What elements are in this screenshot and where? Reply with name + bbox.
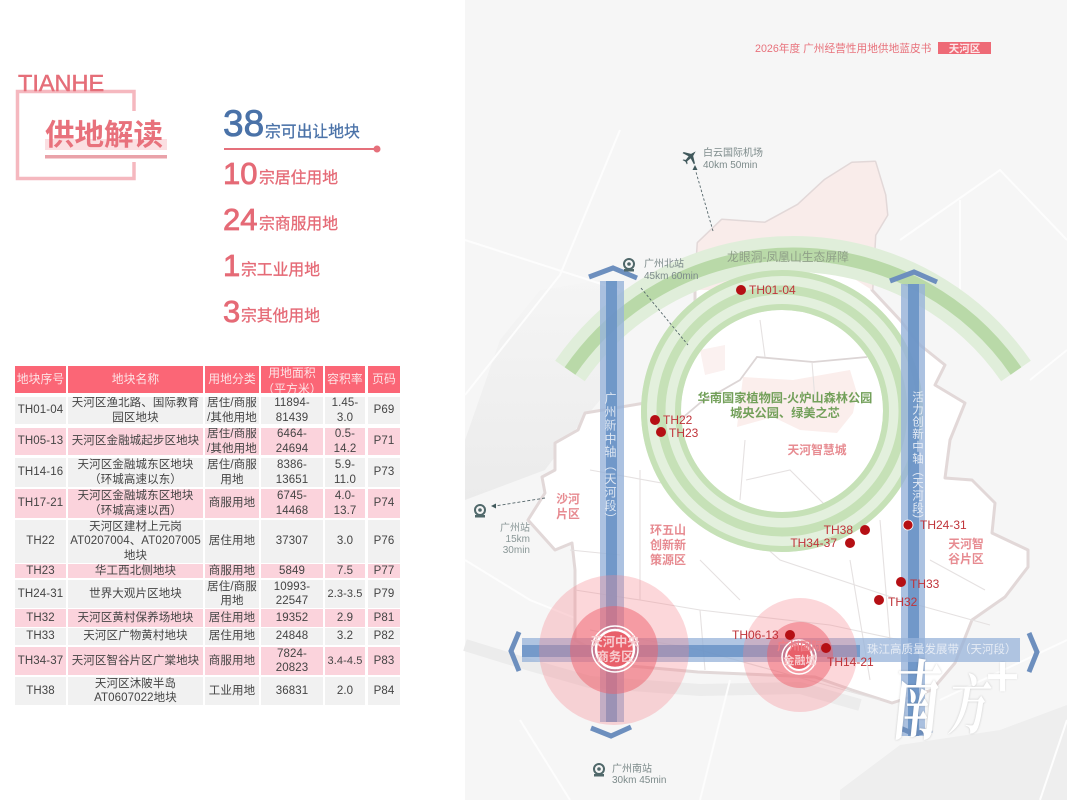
transit: Baiyun airport: 40km 50min — [703, 160, 757, 171]
row TH17-21: P74 — [374, 497, 394, 509]
right axis vertical label: 活力创新中轴（天河段） — [911, 390, 924, 526]
stat: 10 residential — [223, 156, 338, 191]
row TH34-37: P83 — [374, 655, 394, 667]
axis arrow chevrons — [511, 268, 1037, 736]
row TH14-16: 11.0 — [334, 474, 356, 486]
title block: TIANHE 供地解读 — [16, 70, 167, 180]
row TH24-31: 世界大观片区地块 — [89, 588, 182, 600]
transit: Guangzhou station: 广州站 — [500, 521, 530, 534]
row TH32: P81 — [374, 612, 394, 624]
row TH24-31: 22547 — [276, 595, 308, 607]
table header: 地块名称 — [112, 372, 159, 386]
row TH01-04: /其他用地 — [207, 412, 257, 424]
row TH05-13: TH05-13 — [18, 435, 63, 447]
row TH05-13: 6464- — [277, 428, 307, 440]
marker TH06-13: TH06-13 — [732, 628, 779, 642]
zone label: 环五山 — [650, 523, 686, 567]
watermark: 南方+: 南 — [889, 655, 945, 751]
marker TH34-37: TH34-37 — [790, 536, 837, 550]
row TH22: TH22 — [26, 535, 55, 547]
transit: Baiyun airport: 白云国际机场 — [703, 146, 763, 159]
left vertical axis bar — [600, 281, 624, 722]
stat: 3 other: 3 — [223, 294, 240, 329]
river axis label: 珠江高质量发展带（天河段） — [867, 642, 1016, 656]
row TH24-31: 10993- — [274, 581, 310, 593]
row TH23: TH23 — [26, 565, 55, 577]
table header — [15, 366, 400, 393]
row TH33: 天河区广物黄村地块 — [83, 630, 188, 642]
row TH17-21: TH17-21 — [18, 497, 63, 509]
transit: Guangzhou North station: 45km 60min — [644, 271, 698, 282]
district tag — [938, 42, 991, 54]
row TH23: P77 — [374, 565, 394, 577]
row TH32: 19352 — [276, 612, 308, 624]
marker TH22 — [650, 413, 693, 427]
marker TH38: TH38 — [824, 523, 853, 537]
row TH22: 地块 — [124, 550, 147, 562]
row TH05-13 — [15, 428, 400, 455]
row TH14-16: 天河区金融城东区地块 — [78, 459, 194, 471]
row TH33 — [15, 628, 400, 645]
row TH14-16: 5.9- — [335, 459, 355, 471]
finance city circle: 金融城 — [784, 653, 816, 667]
stat: 10 residential: 宗居住用地 — [259, 170, 338, 187]
district outline — [528, 162, 1028, 703]
row TH01-04: 天河区渔北路、国际教育 — [72, 397, 199, 409]
decorative frame — [16, 90, 167, 180]
right vertical axis bar — [901, 284, 925, 736]
transit: Guangzhou station: 30min — [503, 545, 530, 556]
stat: 38 parcels — [223, 103, 360, 144]
zone label: 天河智慧城: 天河智慧城 — [788, 443, 847, 457]
row TH01-04 — [15, 397, 400, 424]
transit: Guangzhou North station: 广州北站 — [644, 257, 684, 270]
table header: 用地面积 — [268, 366, 316, 380]
row TH24-31 — [15, 580, 400, 608]
marker TH23 — [656, 426, 699, 440]
chinese heading: 供地解读 — [45, 119, 163, 152]
zone label: 沙河片区 — [556, 492, 580, 521]
marker TH33: TH33 — [910, 577, 940, 591]
marker TH01-04: TH01-04 — [749, 283, 796, 297]
row TH23 — [15, 564, 400, 578]
row TH14-16: （环城高速以东） — [89, 474, 182, 486]
park label: 华南国家植物园-火炉山森林公园 — [698, 390, 872, 405]
row TH22: 3.0 — [337, 535, 353, 547]
row TH17-21: 天河区金融城东区地块 — [78, 490, 194, 502]
row TH38: P84 — [374, 685, 394, 697]
row TH14-16: 用地 — [220, 474, 244, 486]
row TH32: 居住用地 — [209, 612, 255, 624]
table header: 容积率 — [327, 372, 363, 386]
park label — [698, 390, 872, 420]
row TH17-21: 6745- — [277, 490, 307, 502]
stat: 1 industrial: 宗工业用地 — [241, 262, 320, 279]
row TH24-31: 2.3-3.5 — [328, 588, 362, 600]
row TH34-37 — [15, 647, 400, 675]
row TH01-04: 3.0 — [337, 412, 353, 424]
watermark: 南方+ — [889, 644, 1019, 751]
left axis vertical label: 广州新中轴（天河段） — [603, 392, 617, 526]
marker TH22: TH22 — [663, 413, 693, 427]
row TH17-21: 4.0- — [335, 490, 355, 502]
row TH17-21: 13.7 — [334, 504, 356, 516]
row TH34-37: 20823 — [276, 662, 308, 674]
row TH24-31: 居住/商服 — [207, 581, 257, 593]
row TH23: 商服用地 — [209, 565, 255, 577]
row TH14-16: 8386- — [277, 459, 307, 471]
row TH24-31: TH24-31 — [18, 588, 63, 600]
CBD circle: 商务区 — [597, 649, 633, 664]
stat: 38 parcels: 38 — [223, 103, 264, 144]
stat: 38 parcels: 宗可出让地块 — [265, 124, 360, 141]
row TH22: 37307 — [276, 535, 308, 547]
transit: Guangzhou station — [475, 498, 545, 556]
transit: Baiyun airport — [679, 146, 763, 231]
row TH14-16 — [15, 458, 400, 487]
row TH17-21: 14468 — [276, 504, 308, 516]
header line with district tag — [755, 42, 991, 55]
row TH38: TH38 — [26, 685, 55, 697]
ecological barrier label: 龙眼洞-凤凰山生态屏障 — [727, 250, 849, 264]
table header: 地块序号 — [17, 372, 64, 386]
row TH01-04: 园区地块 — [112, 412, 159, 424]
row TH34-37: 3.4-4.5 — [328, 655, 362, 667]
row TH01-04: 81439 — [276, 412, 308, 424]
stat: 24 commercial — [223, 202, 338, 237]
row TH17-21: （环城高速以西） — [89, 504, 182, 516]
row TH22: 天河区建材上元岗 — [89, 521, 182, 533]
row TH34-37: TH34-37 — [18, 655, 63, 667]
stat: 3 other: 宗其他用地 — [241, 308, 320, 325]
stat: 1 industrial — [223, 248, 320, 283]
row TH33: 居住用地 — [209, 630, 255, 642]
row TH38: 天河区沐陂半岛 — [95, 678, 176, 690]
row TH14-16: TH14-16 — [18, 466, 63, 478]
zone label: 天河智谷片区: 谷片区 — [948, 552, 984, 566]
horizontal Pearl River axis bar — [522, 638, 1020, 662]
stat: 24 commercial: 24 — [223, 202, 257, 237]
divider line with dot — [224, 146, 380, 152]
row TH38 — [15, 677, 400, 705]
row TH17-21: 商服用地 — [209, 497, 255, 509]
row TH22: AT0207004、AT0207005 — [70, 535, 201, 547]
transit: Guangzhou South station: 30km 45min — [612, 775, 666, 786]
row TH01-04: 居住/商服 — [207, 397, 257, 409]
stat: 24 commercial: 宗商服用地 — [259, 216, 338, 233]
marker TH32 — [874, 595, 918, 609]
row TH14-16: 居住/商服 — [207, 459, 257, 471]
row TH24-31: P79 — [374, 588, 394, 600]
row TH14-16: P73 — [374, 466, 394, 478]
row TH01-04: 1.45- — [332, 397, 358, 409]
stat: 3 other — [223, 294, 320, 329]
row TH22: 居住用地 — [209, 535, 255, 547]
row TH22: P76 — [374, 535, 394, 547]
row TH38: 36831 — [276, 685, 308, 697]
row TH34-37: 7824- — [277, 648, 307, 660]
transit: Guangzhou North station — [624, 257, 698, 345]
row TH33: TH33 — [26, 630, 55, 642]
row TH24-31: 用地 — [220, 595, 244, 607]
northern forest tint — [695, 162, 887, 290]
zone label: 天河智谷片区 — [948, 537, 984, 566]
transit: Guangzhou station: 15km — [506, 534, 530, 545]
zone label: 环五山: 创新新 — [650, 537, 686, 552]
row TH05-13: 居住/商服 — [207, 428, 257, 440]
row TH38: AT0607022地块 — [94, 692, 177, 704]
marker TH14-21 — [821, 643, 874, 669]
transit: Guangzhou South station — [594, 762, 666, 786]
stat: 1 industrial: 1 — [223, 248, 240, 283]
row TH34-37: 天河区智谷片区广棠地块 — [72, 655, 199, 667]
parcel markers — [650, 283, 967, 669]
row TH32: 2.9 — [337, 612, 353, 624]
row TH05-13: /其他用地 — [207, 442, 257, 454]
row TH32 — [15, 609, 400, 627]
row TH01-04: 11894- — [274, 397, 310, 409]
marker TH32: TH32 — [888, 595, 918, 609]
marker TH14-21: TH14-21 — [827, 655, 874, 669]
zone label: 环五山: 环五山 — [650, 523, 686, 537]
header text: 2026年度 广州经营性用地供地蓝皮书 — [755, 43, 931, 55]
CBD circle — [539, 575, 689, 725]
row TH32: 天河区黄村保养场地块 — [78, 612, 194, 624]
row TH05-13: 0.5- — [335, 428, 355, 440]
row TH32: TH32 — [26, 612, 55, 624]
table header: 页码 — [372, 372, 396, 386]
row TH23: 7.5 — [337, 565, 353, 577]
transit: Guangzhou South station: 广州南站 — [612, 762, 652, 775]
parcel table — [15, 366, 400, 705]
zone label: 沙河片区: 片区 — [556, 507, 580, 521]
row TH34-37: 商服用地 — [209, 655, 255, 667]
park label: 城央公园、绿美之芯 — [730, 405, 840, 420]
outer green arc: ecological barrier — [570, 254, 1016, 371]
row TH33: 3.2 — [337, 630, 353, 642]
watermark: 南方+: + — [986, 644, 1019, 709]
marker TH33 — [896, 577, 940, 591]
marker TH24-31: TH24-31 — [920, 518, 967, 532]
inner green ring — [644, 273, 920, 549]
watermark: 南方+: 方 — [946, 671, 995, 742]
zone label: 沙河片区: 沙河 — [556, 492, 580, 506]
zone label: 环五山: 策源区 — [650, 552, 686, 567]
finance city circle — [743, 598, 857, 712]
row TH33: 24848 — [276, 630, 308, 642]
zone label: 天河智谷片区: 天河智 — [948, 537, 984, 551]
CBD circle: 天河中央 — [590, 634, 640, 649]
english heading: TIANHE — [18, 70, 104, 96]
row TH23: 5849 — [279, 565, 305, 577]
row TH01-04: P69 — [374, 404, 394, 416]
row TH05-13: 天河区金融城起步区地块 — [72, 435, 199, 447]
row TH38: 工业用地 — [209, 685, 255, 697]
row TH22 — [15, 520, 400, 563]
marker TH38 — [824, 523, 870, 537]
finance city circle: 广州国际 — [777, 639, 823, 653]
table header: 用地分类 — [208, 372, 256, 386]
row TH14-16: 13651 — [276, 474, 308, 486]
row TH38: 2.0 — [337, 685, 353, 697]
row TH05-13: 24694 — [276, 442, 308, 454]
row TH33: P82 — [374, 630, 394, 642]
marker TH23: TH23 — [669, 426, 699, 440]
row TH23: 华工西北侧地块 — [95, 565, 176, 577]
row TH05-13: P71 — [374, 435, 394, 447]
row TH05-13: 14.2 — [334, 442, 356, 454]
row TH01-04: TH01-04 — [18, 404, 63, 416]
row TH17-21 — [15, 489, 400, 518]
stat: 10 residential: 10 — [223, 156, 257, 191]
